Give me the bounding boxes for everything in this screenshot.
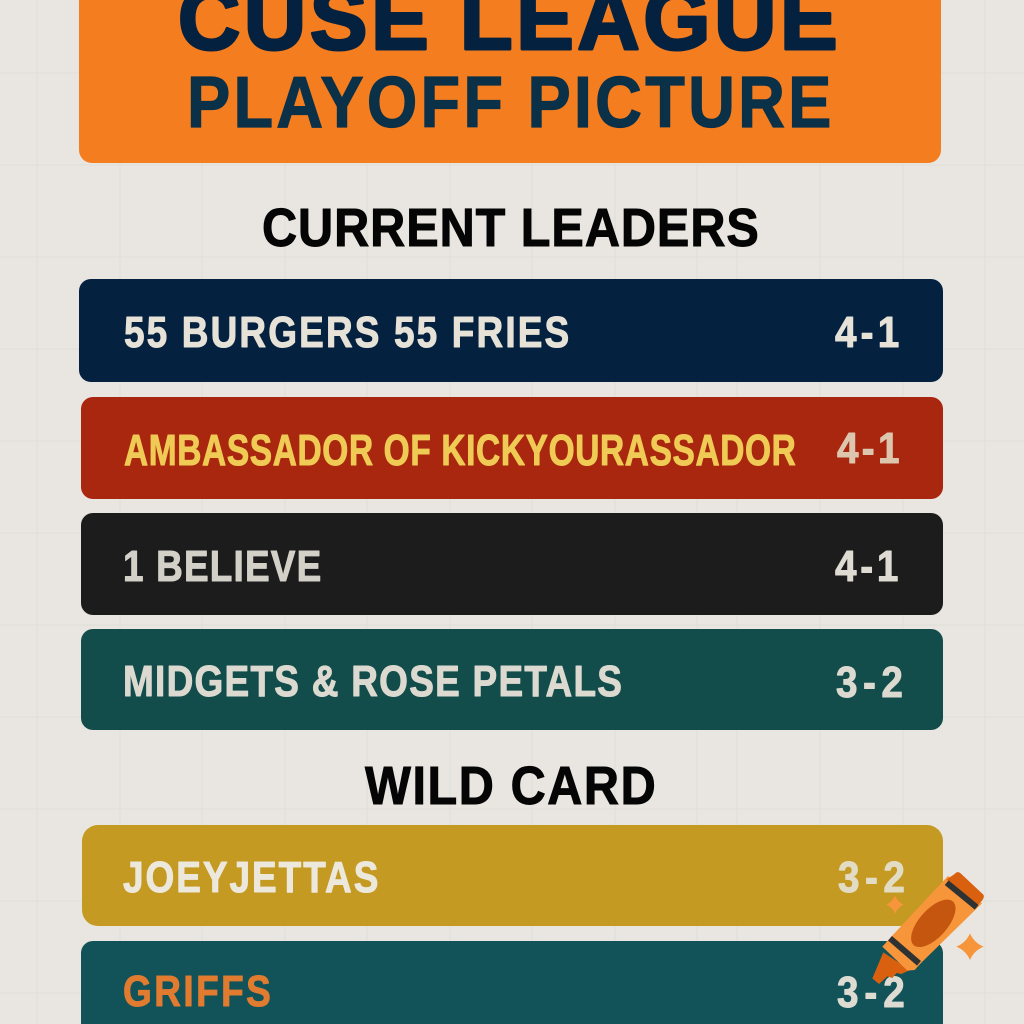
heading: wild card: WILD CARD <box>365 755 656 816</box>
team row: Griffs: 3-2 <box>837 967 905 1017</box>
team row: JoeyJettas <box>82 825 943 926</box>
team row: Ambassador of Kickyourassador: AMBASSADOR OF KICKYOURASSADOR <box>124 427 796 475</box>
team row: 1 Believe <box>81 513 943 615</box>
team row: Midgets & Rose Petals: 3-2 <box>836 657 903 707</box>
team row: Ambassador of Kickyourassador <box>81 397 943 499</box>
header banner <box>79 0 941 163</box>
team row: 1 Believe: 1 BELIEVE <box>123 541 321 591</box>
team row: Ambassador of Kickyourassador: 4-1 <box>837 423 899 473</box>
icon: crayon with sparkles <box>872 872 984 984</box>
team row: Midgets & Rose Petals: MIDGETS & ROSE PETALS <box>123 656 622 706</box>
team row: Midgets & Rose Petals <box>81 629 943 730</box>
team row: 55 Burgers 55 Fries: 55 BURGERS 55 FRIES <box>124 307 569 357</box>
team row: 1 Believe: 4-1 <box>835 541 898 591</box>
team row: JoeyJettas: 3-2 <box>838 852 905 902</box>
team row: Griffs <box>81 941 943 1024</box>
team row: 55 Burgers 55 Fries <box>79 279 943 382</box>
team row: JoeyJettas: JOEYJETTAS <box>123 852 378 902</box>
subtitle: Playoff Picture: PLAYOFF PICTURE <box>187 62 831 143</box>
team row: 55 Burgers 55 Fries: 4-1 <box>835 307 899 357</box>
team row: Griffs: GRIFFS <box>123 966 271 1016</box>
heading: current leaders: CURRENT LEADERS <box>262 197 759 258</box>
